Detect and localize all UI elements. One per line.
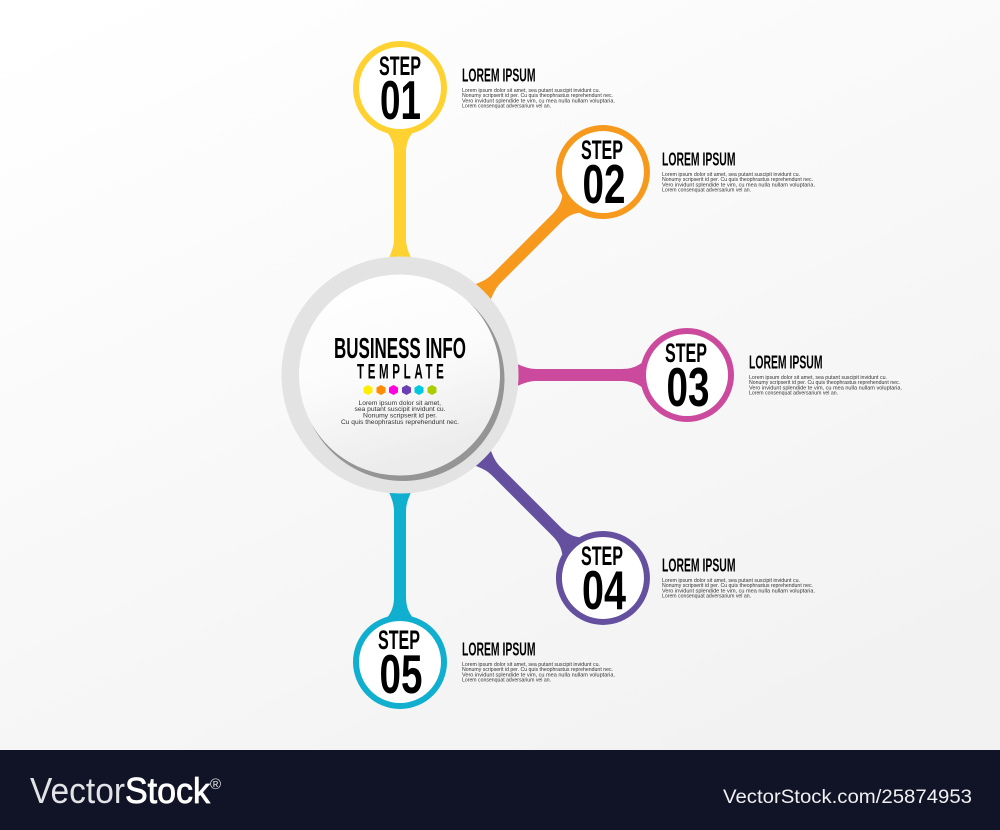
text block: step 04	[662, 554, 815, 600]
text block: step 04: Vero invidunt splendide te vim, cu mea nulla nullam voluptaria.	[662, 588, 815, 594]
text block: step 03: Nonumy scripserit id per. Cu quis theophrastus reprehendunt nec.	[749, 380, 900, 386]
text block: step 03	[749, 352, 902, 397]
text block: step 02: Lorem ipsum dolor sit amet, sea putant suscipit invidunt cu.	[662, 172, 800, 178]
step 05 label	[378, 625, 422, 705]
text block: step 04: Lorem ipsum dolor sit amet, sea putant suscipit invidunt cu.	[662, 578, 800, 584]
text block: step 04: LOREM IPSUM	[662, 554, 736, 576]
footer image id: VectorStock.com/25874953	[723, 787, 972, 808]
step 03 label: 03	[666, 356, 710, 418]
text block: step 03: Lorem consenquat adversarium vel an.	[749, 391, 838, 397]
step 01 label	[379, 51, 421, 131]
step 02 label	[581, 135, 626, 215]
text block: step 02: Lorem consenquat adversarium vel an.	[662, 188, 751, 194]
text block: step 01	[462, 64, 615, 110]
text block: step 05: LOREM IPSUM	[462, 638, 536, 660]
central description	[341, 400, 459, 426]
text block: step 04: Nonumy scripserit id per. Cu quis theophrastus reprehendunt nec.	[662, 583, 813, 589]
text block: step 05: Vero invidunt splendide te vim, cu mea nulla nullam voluptaria.	[462, 672, 615, 678]
connector: step 02	[448, 106, 669, 327]
step 01 label: 01	[380, 69, 421, 131]
step 02 label: 02	[582, 153, 626, 215]
footer logo: Stock	[125, 770, 211, 811]
central description: Nonumy scripserit id per.	[363, 412, 437, 419]
step 04 label	[581, 541, 626, 621]
central subtitle: TEMPLATE	[357, 360, 444, 383]
text block: step 03: LOREM IPSUM	[749, 352, 822, 372]
text block: step 01: Lorem ipsum dolor sit amet, sea putant suscipit invidunt cu.	[462, 88, 600, 94]
footer logo: ®	[210, 776, 221, 793]
text block: step 02: LOREM IPSUM	[662, 148, 736, 170]
text block: step 01: Vero invidunt splendide te vim, cu mea nulla nullam voluptaria.	[462, 98, 615, 104]
hexagon colour dots	[364, 385, 436, 395]
step 02 label: STEP	[581, 135, 623, 165]
footer logo	[30, 770, 221, 811]
central description: Cu quis theophrastus reprehendunt nec.	[341, 419, 459, 426]
text block: step 05	[462, 638, 615, 684]
connector: step 03	[515, 328, 734, 422]
connector: step 01	[353, 41, 447, 260]
central circle	[282, 256, 518, 494]
text block: step 01: LOREM IPSUM	[462, 64, 536, 86]
text block: step 02: Nonumy scripserit id per. Cu quis theophrastus reprehendunt nec.	[662, 177, 813, 183]
central description: Lorem ipsum dolor sit amet,	[358, 400, 441, 407]
text block: step 02: Vero invidunt splendide te vim, cu mea nulla nullam voluptaria.	[662, 182, 815, 188]
text block: step 05: Lorem consenquat adversarium vel an.	[462, 678, 551, 684]
central title: BUSINESS INFO	[334, 333, 466, 365]
text block: step 03: Lorem ipsum dolor sit amet, sea putant suscipit invidunt cu.	[749, 375, 887, 381]
text block: step 04: Lorem consenquat adversarium vel an.	[662, 594, 751, 600]
text block: step 03: Vero invidunt splendide te vim, cu mea nulla nullam voluptaria.	[749, 385, 902, 391]
text block: step 05: Lorem ipsum dolor sit amet, sea putant suscipit invidunt cu.	[462, 662, 600, 668]
text block: step 02	[662, 148, 815, 194]
footer logo: Vector	[30, 770, 125, 811]
connector: step 05	[353, 490, 447, 709]
step 04 label: STEP	[581, 541, 623, 571]
footer bar	[0, 750, 1000, 830]
step 01 label: STEP	[379, 51, 421, 81]
text block: step 05: Nonumy scripserit id per. Cu quis theophrastus reprehendunt nec.	[462, 667, 613, 673]
step 05 label: 05	[380, 643, 422, 705]
text block: step 01: Lorem consenquat adversarium vel an.	[462, 104, 551, 110]
step 05 label: STEP	[378, 625, 420, 655]
step 03 label: STEP	[665, 338, 707, 368]
step 04 label: 04	[582, 559, 626, 621]
central description: sea putant suscipit invidunt cu.	[354, 406, 446, 413]
text block: step 01: Nonumy scripserit id per. Cu quis theophrastus reprehendunt nec.	[462, 93, 613, 99]
step 03 label	[665, 338, 710, 418]
connector: step 04	[448, 423, 669, 644]
